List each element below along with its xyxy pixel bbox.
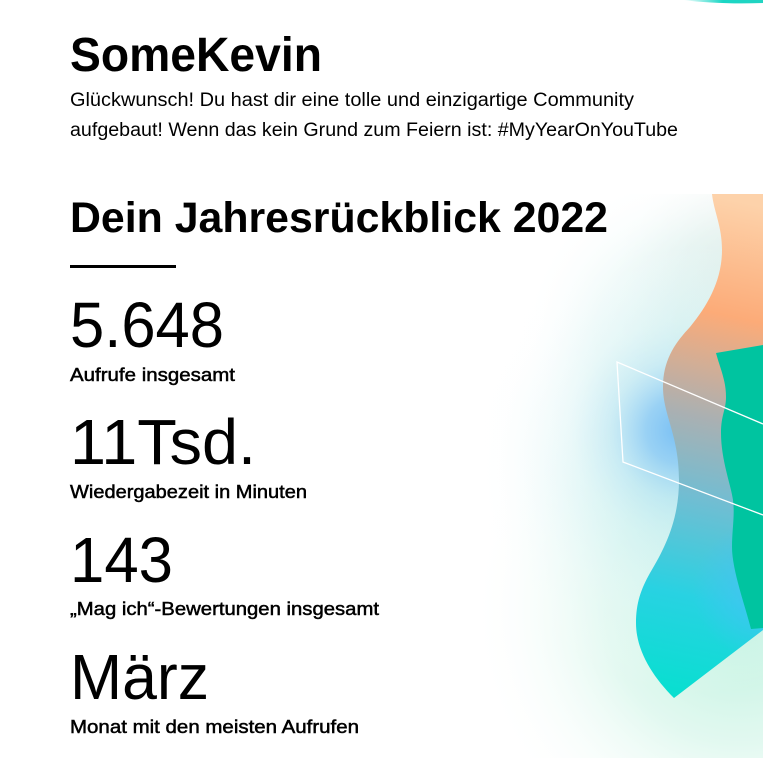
congratulations text: Glückwunsch! Du hast dir eine tolle und einzigartige Community xyxy=(70,90,635,111)
stat: total views: 5.648 xyxy=(70,289,224,361)
heading underline xyxy=(70,265,176,268)
congratulations text: aufgebaut! Wenn das kein Grund zum Feiern ist: #MyYearOnYouTube xyxy=(70,120,678,141)
background glow xyxy=(460,194,763,758)
section heading: Dein Jahresrückblick 2022 xyxy=(70,194,608,242)
decorative shape: top-right teal sliver xyxy=(683,0,763,3)
stat: watch time: 11Tsd. xyxy=(70,406,256,478)
decorative shape: orange-to-cyan flame xyxy=(636,194,763,698)
stat: total views: Aufrufe insgesamt xyxy=(70,364,235,385)
stat: top month: März xyxy=(70,641,209,713)
stat: likes: „Mag ich“-Bewertungen insgesamt xyxy=(70,598,379,619)
stat: watch time xyxy=(70,406,307,502)
stat: top month xyxy=(70,641,359,737)
stat: likes xyxy=(70,524,379,619)
congratulations text xyxy=(70,90,678,141)
decorative shape: green panel xyxy=(716,345,763,629)
channel name heading: SomeKevin xyxy=(70,29,322,82)
stat: watch time: Wiedergabezeit in Minuten xyxy=(70,481,307,502)
stat: top month: Monat mit den meisten Aufrufen xyxy=(70,716,359,737)
stat: likes: 143 xyxy=(70,524,173,596)
decorative shape: white outline xyxy=(617,362,763,515)
